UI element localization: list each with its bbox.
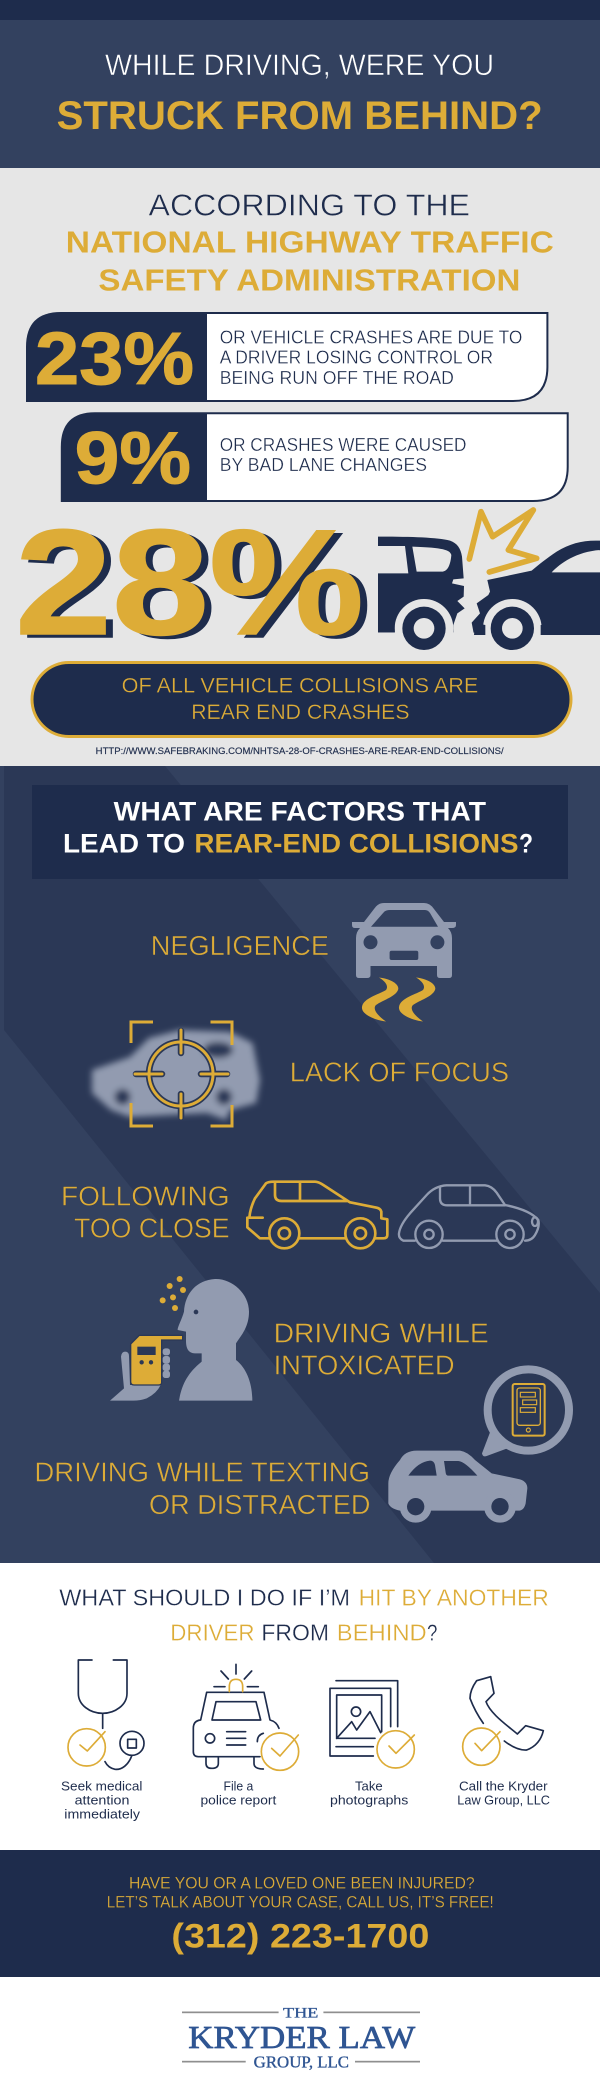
heading: what should I do: [59, 1585, 549, 1646]
icon: photographs: [330, 1681, 414, 1768]
stat text: losing control: OR VEHICLE CRASHES ARE DUE TO: [220, 327, 522, 347]
logo: Kryder Law Group: GROUP, LLC: [254, 2053, 349, 2072]
step label: call kryder: Law Group, LLC: [457, 1793, 550, 1808]
step label: seek medical: attention: [75, 1793, 129, 1808]
stat text: lane changes: [220, 435, 466, 475]
step label: seek medical: immediately: [64, 1807, 141, 1822]
heading: according to: ACCORDING TO THE: [148, 188, 470, 223]
step label: police report: File a: [224, 1779, 254, 1794]
factor label: driving while texting: OR DISTRACTED: [149, 1489, 370, 1520]
panel: header: [0, 0, 600, 168]
icon: police car: [193, 1664, 299, 1770]
icon: blurred car with reticle: [92, 1022, 260, 1126]
stat card: 9 percent: [61, 412, 569, 502]
stat card: 23 percent: [26, 312, 548, 402]
step label: call kryder: Call the Kryder: [459, 1779, 548, 1794]
icon: car front with skid marks: [352, 903, 456, 1022]
source url: HTTP://WWW.SAFEBRAKING.COM/NHTSA-28-OF-CRASHES-ARE-REAR-END-COLLISIONS/: [96, 746, 504, 757]
step label: photographs: photographs: [330, 1793, 409, 1808]
factor label: lack of focus: LACK OF FOCUS: [290, 1057, 509, 1088]
step label: photographs: [330, 1779, 409, 1808]
heading: agency name: [66, 225, 554, 298]
cta text: LET’S TALK ABOUT YOUR CASE, CALL US, IT’S FREE!: [107, 1892, 494, 1911]
stat text: losing control: [220, 327, 522, 388]
heading: what should I do: HIT BY ANOTHER: [359, 1585, 549, 1611]
panel: factors: [0, 766, 600, 1563]
heading panel: factors: WHAT ARE FACTORS THAT: [114, 797, 486, 827]
stat value: 28 percent: 28%: [22, 501, 371, 669]
heading: what should I do: WHAT SHOULD I DO IF I’M: [59, 1585, 350, 1611]
step label: seek medical: Seek medical: [61, 1779, 143, 1794]
factor label: following too close: FOLLOWING: [61, 1181, 230, 1212]
stat value: 28 percent: 28%: [15, 498, 364, 666]
step label: police report: police report: [200, 1793, 277, 1808]
icon: car with phone bubble: [388, 1369, 569, 1523]
factor label: driving while intoxicated: DRIVING WHILE: [274, 1317, 489, 1348]
heading: what should I do: BEHIND: [337, 1620, 427, 1646]
logo: Kryder Law Group: THE: [283, 2006, 318, 2022]
heading: what should I do: DRIVER: [170, 1620, 254, 1646]
factor label: driving while texting: DRIVING WHILE TEXTING: [34, 1457, 370, 1488]
icon: telephone: [463, 1677, 543, 1765]
icon: photographs and phone: [330, 1677, 543, 1768]
cta text: [107, 1873, 494, 1911]
callout pill: rear end crashes: OF ALL VEHICLE COLLISIONS ARE: [122, 674, 478, 698]
panel: call to action: [0, 1850, 600, 1977]
stat text: losing control: BEING RUN OFF THE ROAD: [220, 368, 454, 388]
icon: gold car outline: [247, 1182, 387, 1248]
heading panel: factors: [32, 785, 568, 879]
heading panel: factors: ?: [519, 828, 533, 858]
icon: impact burst: [469, 510, 537, 572]
heading: while driving: WHILE DRIVING, WERE YOU: [105, 49, 494, 82]
icon: gray car outline: [399, 1185, 539, 1248]
panel: what to do: [59, 1585, 550, 1822]
heading panel: factors: LEAD TO: [63, 828, 185, 858]
callout pill: rear end crashes: REAR END CRASHES: [191, 700, 410, 724]
stat value: 9%: 9%: [75, 416, 191, 500]
stat value: 23%: 23%: [35, 317, 194, 400]
stat text: losing control: A DRIVER LOSING CONTROL OR: [220, 347, 493, 367]
cta text: HAVE YOU OR A LOVED ONE BEEN INJURED?: [129, 1873, 475, 1892]
stat text: lane changes: BY BAD LANE CHANGES: [220, 455, 427, 475]
heading: struck from behind: STRUCK FROM BEHIND?: [57, 94, 543, 138]
icon: stethoscope and police car: [68, 1660, 299, 1770]
heading: what should I do: ?: [427, 1620, 437, 1646]
stat text: lane changes: OR CRASHES WERE CAUSED: [220, 435, 466, 455]
callout pill: rear end crashes: [32, 662, 571, 736]
step label: photographs: Take: [355, 1779, 383, 1794]
step label: call kryder: [457, 1779, 550, 1808]
heading panel: factors: REAR-END COLLISIONS: [194, 828, 519, 858]
panel: statistics: [0, 168, 600, 766]
icon: car crash: [377, 510, 600, 658]
logo: Kryder Law Group: [182, 2006, 420, 2072]
factor label: driving while intoxicated: [274, 1317, 489, 1380]
step label: seek medical: [61, 1779, 143, 1822]
factor label: negligence: NEGLIGENCE: [151, 930, 329, 961]
factor label: following too close: TOO CLOSE: [74, 1213, 230, 1244]
heading: what should I do: FROM: [261, 1620, 329, 1646]
factor label: driving while texting: [34, 1457, 371, 1520]
heading: agency name: NATIONAL HIGHWAY TRAFFIC: [66, 225, 554, 260]
step label: police report: [200, 1779, 277, 1808]
icon: two cars following: [247, 1182, 539, 1248]
logo: Kryder Law Group: KRYDER LAW: [188, 2019, 416, 2055]
factor label: driving while intoxicated: INTOXICATED: [274, 1349, 455, 1380]
heading: agency name: SAFETY ADMINISTRATION: [98, 263, 520, 298]
factor label: following too close: [61, 1181, 230, 1244]
phone number: (312) 223-1700: [171, 1917, 429, 1955]
icon: breathalyzer test: [110, 1276, 252, 1401]
icon: stethoscope: [68, 1660, 144, 1769]
